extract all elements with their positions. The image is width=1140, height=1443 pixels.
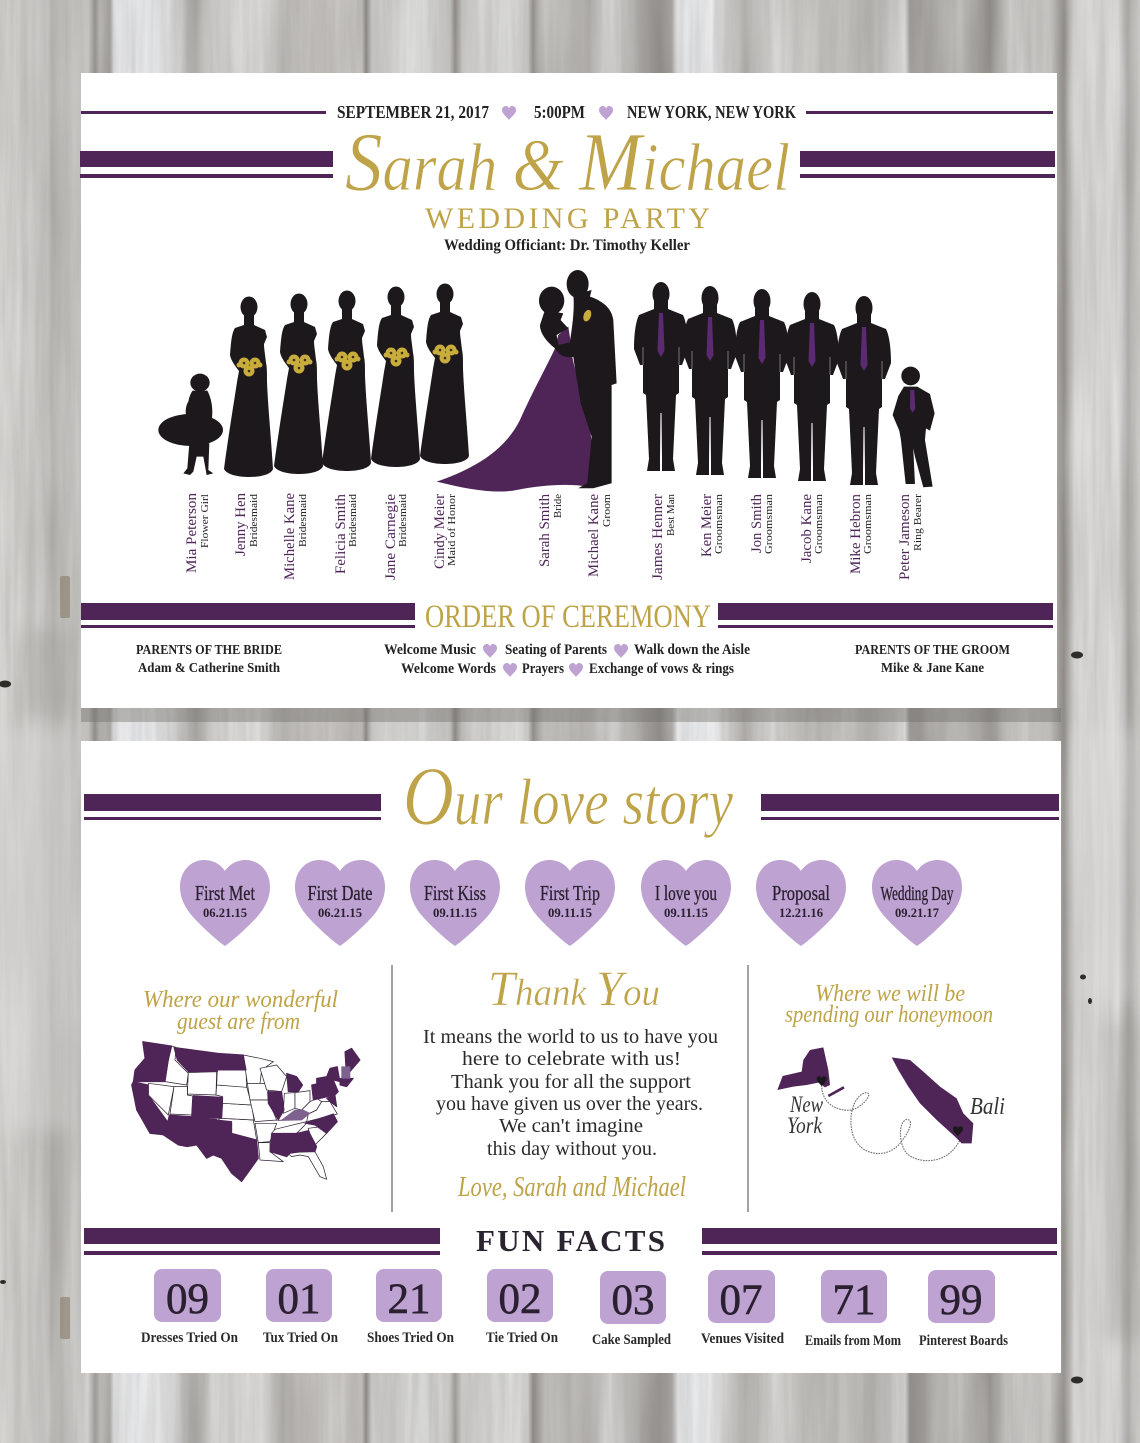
heart: wedding day: 09.21.17: [895, 905, 939, 920]
silhouette: bride and groom: [437, 270, 617, 492]
heart: i love you: [641, 860, 731, 946]
heart: wedding day: Wedding Day: [880, 883, 954, 905]
new york state: [777, 1047, 830, 1090]
silhouettes: bridesmaids: [224, 284, 469, 477]
new york label: [787, 1092, 824, 1138]
heart: first kiss: [410, 860, 500, 946]
heart: first trip: 09.11.15: [548, 905, 592, 920]
names and roles: Michael Kane: [586, 494, 602, 577]
fact: cake: 03: [612, 1277, 654, 1324]
fact: pinterest: [919, 1270, 1008, 1349]
panel: wedding party: [80, 73, 1057, 708]
names and roles: Jenny Hen: [233, 493, 249, 556]
ceremony order list: [384, 642, 750, 677]
fact: venues: 07: [720, 1277, 762, 1324]
heart: first kiss: 09.11.15: [433, 905, 477, 920]
thank you message: this day without you.: [487, 1138, 657, 1160]
heart: first date: [295, 860, 385, 946]
header bars: [80, 111, 1055, 178]
heart: first date: 06.21.15: [318, 905, 362, 920]
thank you message: It means the world to us to have you: [423, 1026, 718, 1048]
thank you signature: Love, Sarah and Michael: [457, 1171, 686, 1203]
heart: proposal: [756, 860, 846, 946]
heading: wedding party: WEDDING PARTY: [425, 202, 710, 235]
names and roles: Ken Meier: [699, 494, 715, 557]
background: lower wood planks: [0, 722, 1140, 1443]
fact: venues: [701, 1270, 785, 1347]
wood seam band: [81, 708, 1061, 722]
names and roles: Jane Carnegie: [383, 494, 399, 580]
darker plank patches: [22, 630, 1140, 1340]
names and roles: Mia Peterson: [184, 493, 200, 573]
names and roles: Peter Jameson: [897, 494, 913, 580]
fact: shoes: Shoes Tried On: [367, 1330, 455, 1346]
fact: cake: Cake Sampled: [592, 1332, 672, 1348]
names and roles: Best Man: [666, 494, 677, 536]
map pins: [817, 1076, 963, 1136]
parents of the groom: PARENTS OF THE GROOM: [855, 643, 1010, 658]
heart: first met: First Met: [195, 881, 255, 905]
map: new york to bali route: [777, 1047, 973, 1161]
fact: tux: 01: [278, 1276, 320, 1323]
ceremony order list: Exchange of vows & rings: [589, 661, 734, 677]
event details line: 5:00PM: [534, 102, 585, 122]
fact: pinterest: Pinterest Boards: [919, 1333, 1008, 1349]
parents of the groom: Mike & Jane Kane: [881, 661, 984, 676]
dividers: [392, 965, 748, 1212]
ceremony order list: Walk down the Aisle: [634, 642, 750, 658]
heart: first trip: [525, 860, 615, 946]
bali island: [892, 1057, 973, 1143]
heart: first trip: First Trip: [540, 881, 600, 905]
heart: first date: First Date: [308, 881, 372, 905]
thank you message: here to celebrate with us!: [462, 1048, 681, 1070]
heart: first kiss: First Kiss: [424, 881, 486, 905]
thank you message: you have given us over the years.: [436, 1093, 703, 1115]
background: upper wood planks: [0, 0, 1140, 722]
names and roles: James Henner: [650, 494, 666, 580]
ceremony order list: Welcome Words: [401, 661, 496, 677]
heart: wedding day: [872, 860, 962, 946]
parents of the bride: [136, 643, 282, 676]
names and roles: Jon Smith: [749, 494, 765, 553]
guests heading: [143, 987, 338, 1035]
ceremony order list: Seating of Parents: [505, 642, 607, 658]
names and roles: Mike Hebron: [848, 494, 864, 574]
names and roles: Groomsman: [764, 494, 775, 554]
title: couple names: Sarah & Michael: [345, 116, 790, 209]
heart: i love you: 09.11.15: [664, 905, 708, 920]
silhouette: flower girl: [158, 374, 223, 475]
thank you heading: Thank You: [488, 960, 660, 1016]
fact: pinterest: 99: [940, 1277, 982, 1324]
fun facts bars: [84, 1228, 1057, 1255]
names and roles: Flower Girl: [200, 494, 211, 548]
officiant line: Wedding Officiant: Dr. Timothy Keller: [444, 237, 690, 254]
thank you message: Thank you for all the support: [451, 1071, 691, 1093]
fact: dresses: Dresses Tried On: [141, 1330, 239, 1346]
ceremony order list: Prayers: [522, 661, 564, 677]
fact tiles: [141, 1269, 1008, 1349]
names and roles: Felicia Smith: [333, 494, 349, 574]
love story bars: [84, 794, 1059, 820]
heart: first met: 06.21.15: [203, 905, 247, 920]
route line: [822, 1085, 960, 1161]
fact: dresses: [141, 1269, 239, 1346]
names and roles: Maid of Honor: [447, 493, 458, 566]
heart: proposal: 12.21.16: [779, 905, 823, 920]
names and roles: Ring Bearer: [913, 493, 924, 551]
names and roles: Groomsman: [714, 494, 725, 554]
names and roles: Cindy Meier: [432, 494, 448, 569]
heart: first met: [180, 860, 270, 946]
wood chips: [60, 576, 70, 1339]
names and roles: Bridesmaid: [298, 494, 309, 547]
fact: tie: [486, 1269, 559, 1346]
names and roles: Bridesmaid: [348, 494, 359, 547]
light plank patches: [0, 730, 1134, 1130]
honeymoon heading: [785, 981, 993, 1028]
event details line: NEW YORK, NEW YORK: [627, 102, 796, 122]
names and roles: Bridesmaid: [398, 494, 409, 547]
thank you message: We can't imagine: [499, 1115, 643, 1137]
title: our love story: Our love story: [403, 750, 734, 843]
guests heading: guest are from: [177, 1009, 300, 1035]
fact: tux: [263, 1269, 339, 1346]
names and roles: Michelle Kane: [282, 493, 298, 580]
silhouette: ring bearer: [893, 367, 935, 487]
fact: tie: 02: [498, 1276, 542, 1323]
fact: shoes: [367, 1269, 455, 1346]
ceremony order list: Welcome Music: [384, 642, 476, 658]
guests heading: Where our wonderful: [143, 987, 338, 1013]
parents of the bride: PARENTS OF THE BRIDE: [136, 643, 282, 658]
silhouettes: groomsmen: [634, 282, 891, 485]
panel: love story: [81, 741, 1061, 1373]
timeline hearts: [180, 860, 962, 946]
names and roles: Groomsman: [814, 494, 825, 554]
parents of the bride: Adam & Catherine Smith: [138, 661, 280, 676]
names and roles: [184, 493, 924, 580]
fact: emails: Emails from Mom: [805, 1333, 901, 1349]
wood knots: [0, 652, 1092, 1384]
honeymoon heading: Where we will be: [815, 981, 965, 1007]
new york label: York: [787, 1113, 823, 1138]
thank you message: [423, 1026, 718, 1160]
fact: dresses: 09: [166, 1276, 209, 1323]
fact: venues: Venues Visited: [701, 1331, 785, 1347]
fact: cake: [592, 1271, 672, 1348]
fact: emails: 71: [832, 1277, 876, 1324]
names and roles: Groom: [602, 494, 613, 527]
names and roles: Bridesmaid: [249, 494, 260, 547]
fact: tux: Tux Tried On: [263, 1330, 339, 1346]
map: united states guest origins: [132, 1042, 360, 1182]
bali label: Bali: [970, 1094, 1005, 1120]
names and roles: Jacob Kane: [799, 494, 815, 563]
heart: proposal: Proposal: [772, 881, 830, 905]
names and roles: Groomsman: [863, 494, 874, 554]
event details line: [337, 102, 796, 122]
fact: tie: Tie Tried On: [486, 1330, 559, 1346]
new york label: New: [789, 1092, 824, 1117]
heading: order of ceremony: ORDER OF CEREMONY: [425, 599, 711, 635]
ceremony bars: [81, 603, 1053, 628]
long island: [828, 1087, 844, 1096]
fact: shoes: 21: [388, 1276, 430, 1323]
names and roles: Sarah Smith: [537, 494, 553, 567]
names and roles: Bride: [553, 493, 564, 518]
parents of the groom: [855, 643, 1010, 676]
honeymoon heading: spending our honeymoon: [785, 1002, 993, 1028]
heading: fun facts: FUN FACTS: [476, 1223, 665, 1258]
event details line: SEPTEMBER 21, 2017: [337, 102, 489, 122]
heart: i love you: I love you: [655, 881, 717, 905]
fact: emails: [805, 1270, 901, 1349]
